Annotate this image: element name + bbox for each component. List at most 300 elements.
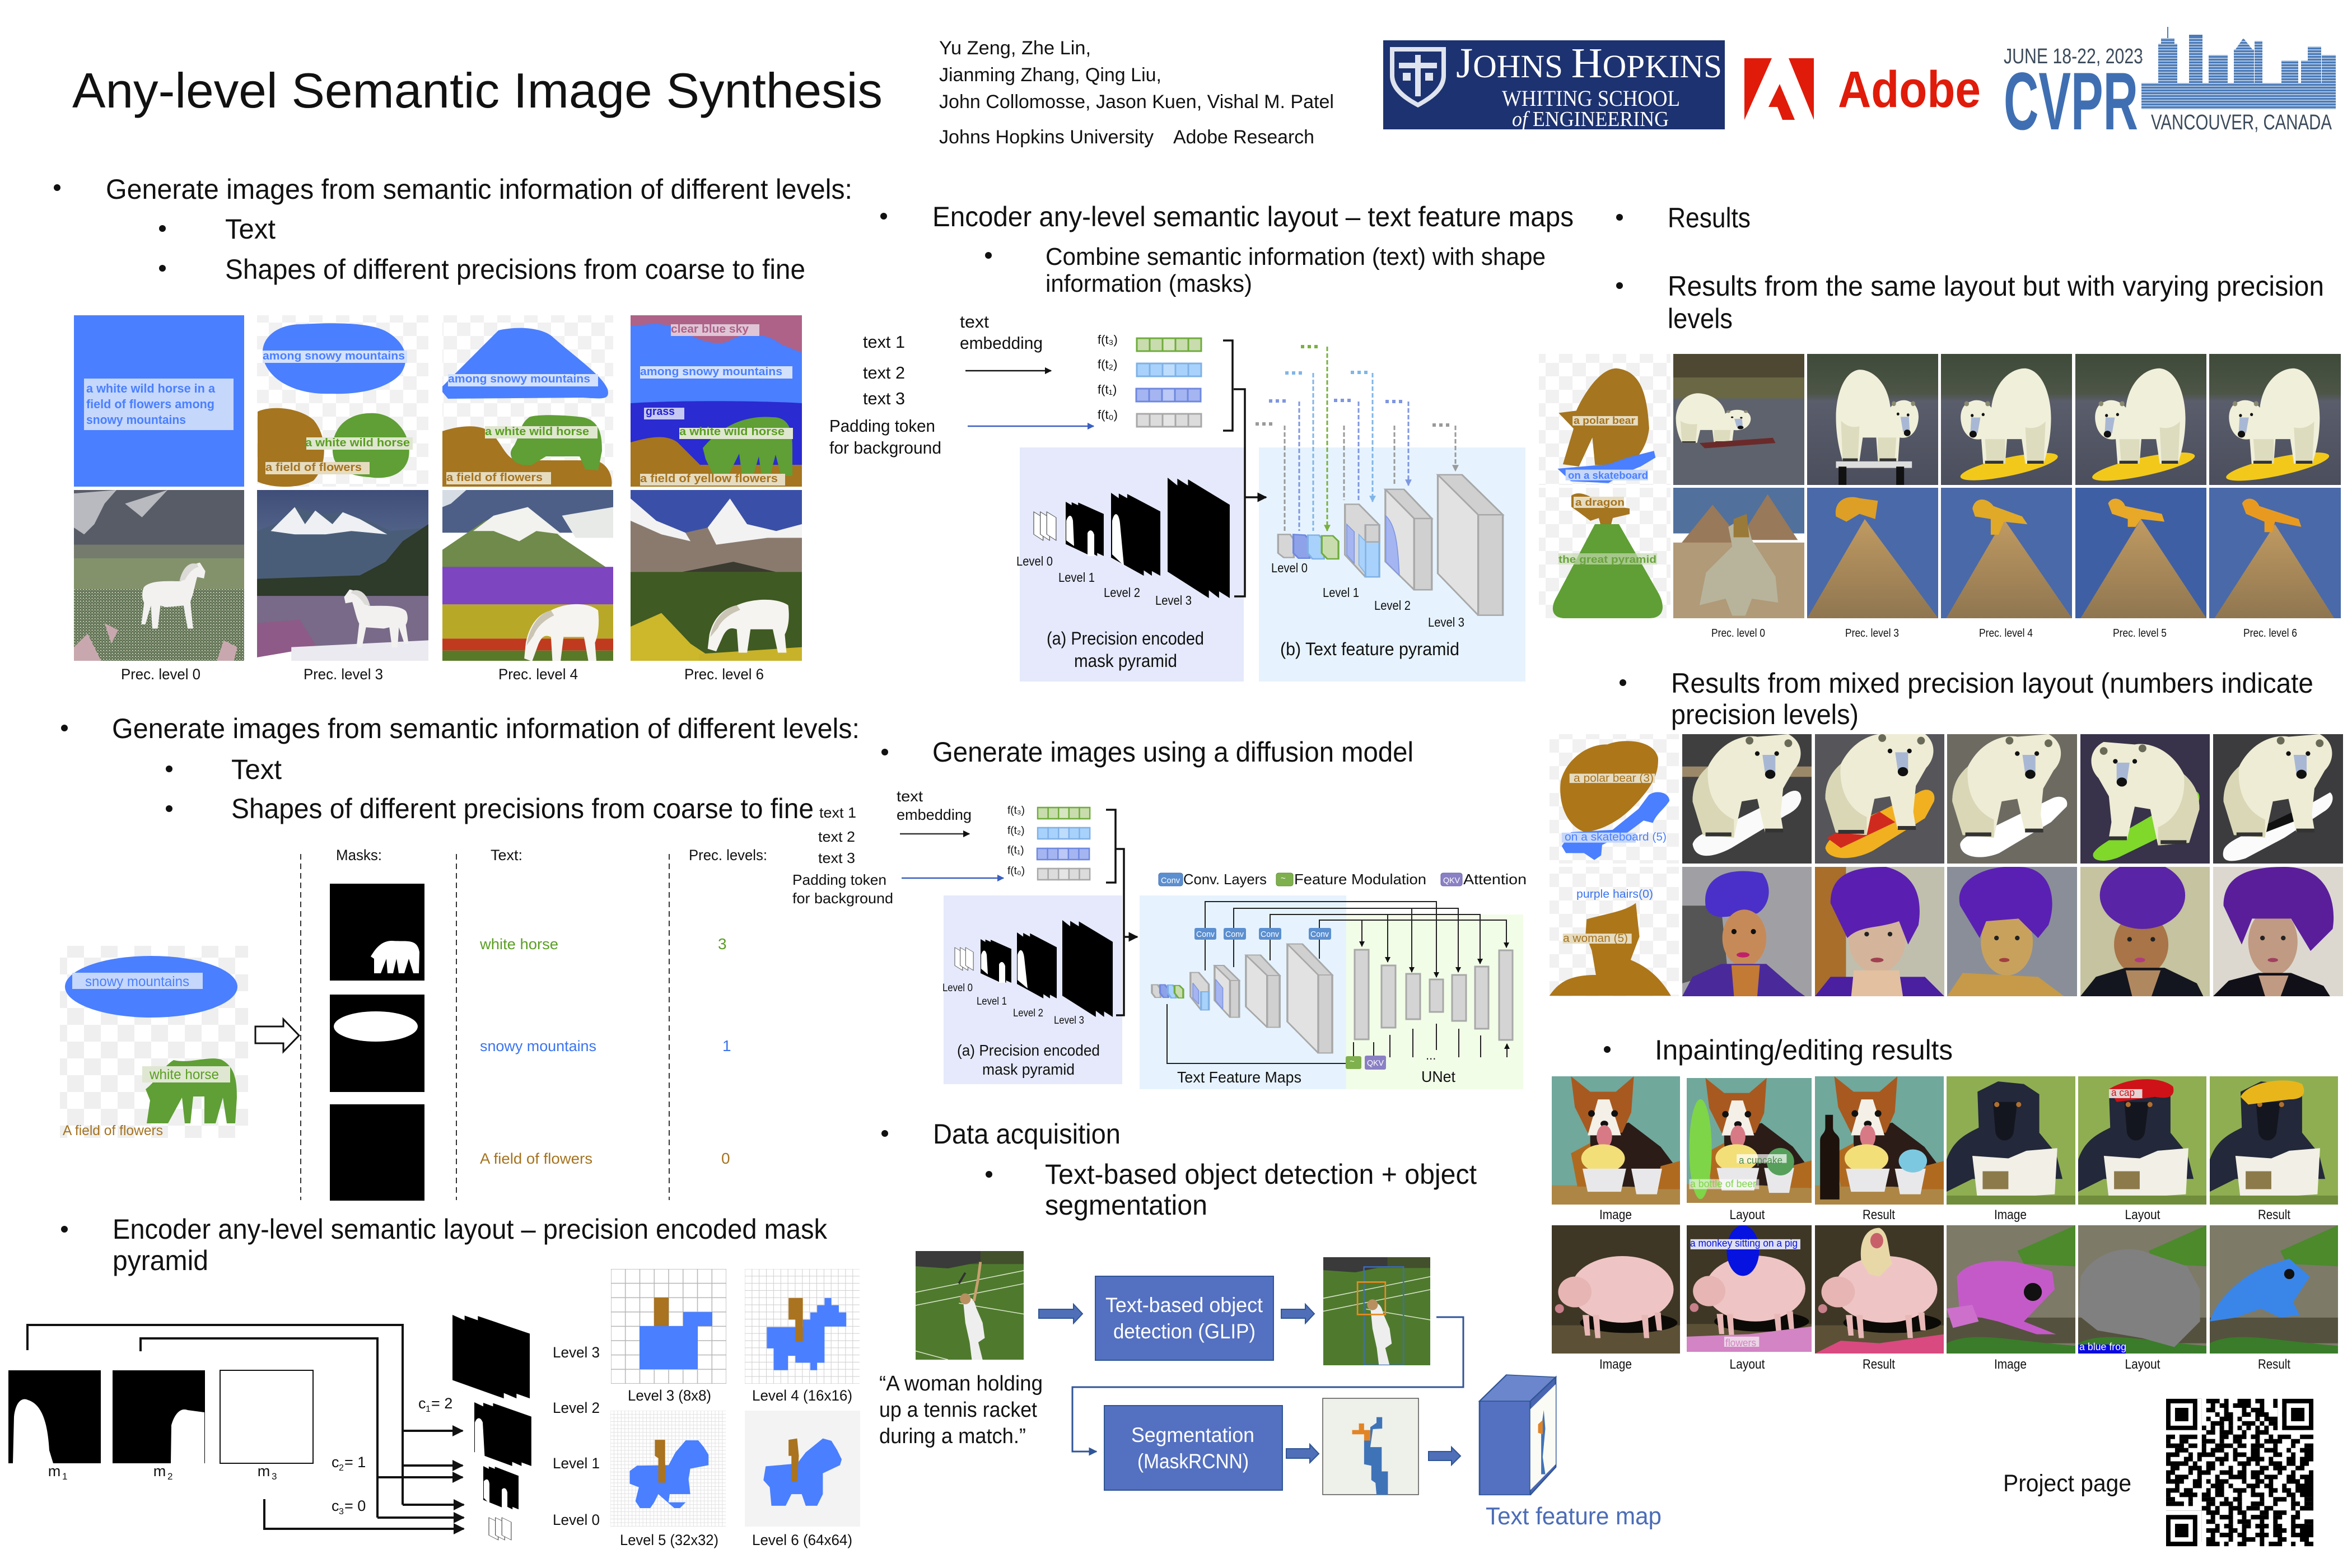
legend: QKV xyxy=(1443,876,1460,885)
photo: bear prec 6 xyxy=(2209,354,2341,485)
column headers xyxy=(336,847,767,864)
text inputs: embedding xyxy=(960,333,1043,353)
box: GLIP: Text-based object xyxy=(1105,1294,1263,1317)
panel a xyxy=(1020,447,1244,682)
section: results heading xyxy=(1616,202,2324,334)
authors: Jianming Zhang, Qing Liu, xyxy=(939,64,1161,86)
section: generate images heading: Shapes of different precisions from coarse to fine xyxy=(225,254,805,285)
section: second generate heading: Shapes of different precisions from coarse to fine xyxy=(231,793,814,824)
layout: bear mixed: a polar bear (3) xyxy=(1574,772,1654,785)
photo: woman 5 xyxy=(2213,867,2343,996)
captions: Prec. level 3 xyxy=(1845,627,1899,640)
inpainting label text xyxy=(1690,1087,2135,1352)
text inputs: text 2 xyxy=(863,363,905,382)
photo: purple frog xyxy=(1947,1225,2075,1354)
stack labels: Level 2 xyxy=(1013,1007,1043,1019)
section: inpainting heading: Inpainting/editing results xyxy=(1655,1034,1953,1066)
logo: Johns Hopkins: WHITING SCHOOL xyxy=(1502,86,1680,111)
diagram: diffusion model xyxy=(792,788,1527,1089)
photo: frog layout xyxy=(2078,1225,2206,1354)
level labels xyxy=(553,1344,600,1528)
photo: horse level 4 xyxy=(442,490,613,661)
bracket xyxy=(1106,810,1137,1015)
coefficient labels: = 0 xyxy=(344,1497,366,1514)
legend: Feature Modulation xyxy=(1294,871,1426,888)
level labels: Level 0 xyxy=(553,1511,600,1528)
level labels: Level 2 xyxy=(553,1399,600,1416)
caption quote: during a match.” xyxy=(879,1425,1026,1448)
layout sketch: snowy mountains xyxy=(85,974,189,990)
mask pyramid stacks xyxy=(1034,478,1230,598)
arrow 3 xyxy=(1286,1444,1319,1463)
grid level 5: Level 5 (32x32) xyxy=(620,1532,718,1548)
stack level 2 xyxy=(474,1402,531,1466)
logo: Johns Hopkins: JOHNS HOPKINS xyxy=(1456,40,1722,87)
diagram captions xyxy=(1177,1068,1455,1086)
panel: grid levels xyxy=(610,1269,860,1548)
mask m2: 2 xyxy=(167,1471,172,1482)
mask m3: 3 xyxy=(272,1471,277,1482)
mask m3: m xyxy=(258,1463,270,1480)
section: second generate heading: Text xyxy=(231,754,282,785)
stack labels: Level 3 xyxy=(1054,1015,1084,1026)
feature modulation and attention xyxy=(1346,1048,1436,1070)
mask m1: 1 xyxy=(62,1471,67,1482)
text inputs: for background xyxy=(829,438,941,458)
text column: snowy mountains xyxy=(480,1038,596,1054)
diagram captions: UNet xyxy=(1421,1068,1455,1085)
qr code xyxy=(2166,1399,2313,1546)
layout: dragon pyramid xyxy=(1539,488,1670,618)
logo: Johns Hopkins xyxy=(1383,40,1725,131)
inpainting captions: Image xyxy=(1599,1357,1632,1372)
inpainting label text: a bottle of beer xyxy=(1690,1178,1756,1189)
embedding labels: f(t₀) xyxy=(1098,408,1118,422)
connector xyxy=(1072,1317,1463,1452)
photo: horse level 0 xyxy=(74,490,244,661)
stack level 3 xyxy=(452,1315,530,1398)
caption: prec level labels: Prec. level 6 xyxy=(684,666,764,683)
mask m2: m xyxy=(153,1463,166,1480)
text inputs: Padding token xyxy=(829,416,935,436)
stack level 0 xyxy=(489,1518,511,1540)
unet bars xyxy=(1355,950,1513,1040)
panel: mixed layout decomposition xyxy=(60,847,767,1201)
layout: level 6: a white wild horse xyxy=(679,426,785,438)
coefficient labels: c xyxy=(332,1497,339,1514)
photo: horse level 6 xyxy=(631,490,802,661)
embedding bars xyxy=(1136,338,1201,427)
layout: polar bear xyxy=(1539,354,1670,485)
text pyramid labels: (b) Text feature pyramid xyxy=(1280,639,1459,659)
section: text feature maps heading: information (masks) xyxy=(1046,270,1252,297)
conv boxes xyxy=(1194,928,1331,940)
panel: prec level layouts xyxy=(74,315,802,487)
photo: pig layout xyxy=(1687,1225,1812,1352)
layout: polar bear: on a skateboard xyxy=(1568,470,1648,481)
photo: pig image xyxy=(1552,1225,1680,1354)
inputs: text 3 xyxy=(818,850,855,866)
skip connections xyxy=(1167,902,1507,1063)
inpainting captions: Image xyxy=(1994,1207,2027,1222)
embedding labels: f(t₁) xyxy=(1098,382,1117,396)
photo: corgi result xyxy=(1815,1076,1944,1205)
inpainting captions: Layout xyxy=(2125,1207,2160,1222)
layout: woman mixed: a woman (5) xyxy=(1563,932,1628,945)
captions: Prec. level 4 xyxy=(1979,627,2033,640)
grid level 6: Level 6 (64x64) xyxy=(752,1532,852,1548)
text pyramid labels: Level 1 xyxy=(1323,585,1359,600)
arrows xyxy=(900,834,1004,878)
authors: Yu Zeng, Zhe Lin, xyxy=(939,38,1091,59)
photo: dragon prec 4 xyxy=(1941,488,2072,618)
precision column: 1 xyxy=(722,1037,731,1054)
logo: Adobe: Adobe xyxy=(1838,61,1981,118)
embedding labels: f(t₃) xyxy=(1098,333,1118,347)
photo: bear prec 5 xyxy=(2075,354,2206,485)
logo: CVPR 2023: CVPR xyxy=(2004,55,2138,147)
coefficient labels: 1 xyxy=(426,1404,431,1414)
conv boxes: Conv xyxy=(1310,930,1329,939)
photo: blue frog xyxy=(2210,1225,2338,1354)
section: mixed precision heading: precision levels) xyxy=(1671,699,1859,730)
text inputs: text 1 xyxy=(863,332,905,352)
logo: CVPR 2023: JUNE 18-22, 2023 xyxy=(2004,45,2143,68)
inpainting captions: Result xyxy=(2258,1207,2290,1222)
section: text feature maps heading: Combine semantic information (text) with shape xyxy=(1046,243,1546,270)
layout: polar bear: a polar bear xyxy=(1574,415,1635,426)
logo: Adobe xyxy=(1744,58,1981,120)
box: GLIP xyxy=(1095,1276,1273,1360)
layout: level 4: a white wild horse xyxy=(485,426,589,438)
mask pyramid labels: Level 0 xyxy=(1016,554,1053,568)
precision column: 0 xyxy=(721,1150,730,1167)
coefficient labels xyxy=(332,1395,452,1516)
embedding labels: f(t₂) xyxy=(1098,357,1117,371)
caption: prec level labels: Prec. level 0 xyxy=(121,666,200,683)
label: project page: Project page xyxy=(2003,1470,2131,1497)
mask: ellipse xyxy=(330,995,424,1092)
layout: level 4: among snowy mountains xyxy=(448,373,590,385)
inpainting captions: Layout xyxy=(1729,1357,1765,1372)
coefficient labels: 3 xyxy=(339,1507,344,1516)
feature modulation and attention: ... xyxy=(1426,1048,1436,1062)
layout: woman mixed xyxy=(1550,867,1679,996)
arrow: hollow xyxy=(255,1019,299,1052)
feature modulation and attention: ~ xyxy=(1350,1057,1355,1066)
stack level 1 xyxy=(483,1466,519,1509)
photo: dragon prec 6 xyxy=(2209,488,2341,618)
inpainting captions: Layout xyxy=(1729,1207,1765,1222)
photo: woman 2 xyxy=(1815,867,1944,996)
inpainting label text: a blue frog xyxy=(2079,1341,2126,1352)
mask pyramid labels: Level 3 xyxy=(1155,593,1192,608)
legend: Attention xyxy=(1463,871,1527,888)
caption text feature map: Text feature map xyxy=(1486,1502,1662,1530)
authors: Johns Hopkins University xyxy=(939,127,1154,148)
inpainting captions: Image xyxy=(1599,1207,1632,1222)
layout: bear mixed: on a skateboard (5) xyxy=(1565,831,1667,843)
coefficient labels: c xyxy=(332,1454,339,1471)
panel b xyxy=(1259,447,1525,682)
section: text feature maps heading xyxy=(880,201,1574,297)
text pyramid cubes xyxy=(1278,475,1503,615)
layout: level 0: snowy mountains xyxy=(86,413,186,427)
photo: corgi layout xyxy=(1687,1078,1812,1203)
segmentation result xyxy=(1323,1398,1418,1495)
title: Any-level Semantic Image Synthesis xyxy=(72,63,883,118)
captions: Prec. level 5 xyxy=(2113,627,2167,640)
authors: Adobe Research xyxy=(1173,127,1314,148)
grid level 6 xyxy=(745,1411,860,1548)
section: text feature maps heading: Encoder any-level semantic layout – text feature maps xyxy=(932,201,1574,232)
photo: dragon prec 0 xyxy=(1673,488,1804,618)
mask m3 xyxy=(220,1370,313,1482)
column headers: Masks: xyxy=(336,847,382,864)
caption quote: up a tennis racket xyxy=(879,1398,1037,1422)
embedding xyxy=(1007,805,1090,880)
logo: CVPR 2023 xyxy=(2004,27,2336,147)
inpainting captions: Image xyxy=(1994,1357,2027,1372)
text inputs: text 3 xyxy=(863,389,905,408)
layout: level 0: a white wild horse in a xyxy=(86,381,216,395)
legend: Conv xyxy=(1161,876,1180,885)
inpainting captions: Layout xyxy=(2125,1357,2160,1372)
photo: tennis with boxes xyxy=(1323,1257,1430,1365)
connectors xyxy=(27,1325,464,1529)
section: mixed precision heading xyxy=(1620,668,2313,730)
diagram captions: Text Feature Maps xyxy=(1177,1068,1301,1086)
mask m2 xyxy=(113,1370,205,1482)
box: segmentation: (MaskRCNN) xyxy=(1137,1450,1249,1473)
inputs: for background xyxy=(792,890,893,907)
text pyramid labels xyxy=(1271,561,1464,659)
text column: A field of flowers xyxy=(480,1150,592,1167)
inpainting label text: flowers xyxy=(1725,1337,1756,1348)
photo: dark dog image xyxy=(1947,1076,2075,1205)
layout: level 6 xyxy=(631,315,802,487)
dots xyxy=(1256,347,1450,425)
arrow 1 xyxy=(1039,1304,1082,1323)
legend xyxy=(1159,871,1527,888)
brackets xyxy=(1223,340,1266,596)
inputs xyxy=(792,788,972,907)
text column: white horse xyxy=(479,936,558,953)
photo: mixed bear 4 xyxy=(2080,734,2210,864)
coefficient labels: = 2 xyxy=(431,1395,452,1412)
layout: dragon pyramid: the great pyramid xyxy=(1558,554,1656,565)
layout sketch: A field of flowers xyxy=(63,1123,163,1138)
inpainting label text: a cupcake xyxy=(1739,1155,1782,1166)
inputs: text 2 xyxy=(818,828,855,845)
mask: white horse xyxy=(330,884,424,981)
layout: level 4: a field of flowers xyxy=(446,472,543,484)
section: generate images heading xyxy=(54,174,852,285)
mask pyramid labels xyxy=(1016,554,1204,671)
layout: level 0: field of flowers among xyxy=(86,397,214,411)
coefficient labels: = 1 xyxy=(344,1454,366,1471)
photo: dark dog layout xyxy=(2078,1076,2206,1205)
text pyramid labels: Level 0 xyxy=(1271,561,1308,575)
section: data acquisition heading xyxy=(881,1118,1477,1221)
captions: Prec. level 6 xyxy=(2243,627,2297,640)
section: data acquisition heading: segmentation xyxy=(1045,1189,1207,1221)
conv boxes: Conv xyxy=(1225,930,1244,939)
grid level 5 xyxy=(610,1411,726,1548)
photo: pig result xyxy=(1815,1225,1944,1354)
coefficient labels: 2 xyxy=(339,1463,344,1473)
box: GLIP: detection (GLIP) xyxy=(1113,1320,1256,1343)
layout: level 4 xyxy=(442,315,613,487)
panel text feature maps xyxy=(1140,895,1346,1089)
inputs: text 1 xyxy=(819,804,856,821)
inpainting captions: Result xyxy=(1863,1207,1895,1222)
section: mixed precision heading: Results from mixed precision layout (numbers indicate xyxy=(1671,668,2313,699)
text pyramid labels: Level 3 xyxy=(1428,615,1464,629)
embedding: f(t₁) xyxy=(1007,844,1024,856)
conv boxes: Conv xyxy=(1196,930,1215,939)
layout: level 3 xyxy=(257,315,428,487)
section: data acquisition heading: Data acquisition xyxy=(933,1118,1121,1150)
arrows: embedding xyxy=(965,371,1094,426)
conv boxes: Conv xyxy=(1261,930,1279,939)
inputs: Padding token xyxy=(792,871,886,888)
layout sketch: white horse xyxy=(149,1067,219,1082)
grid level 3 xyxy=(611,1269,726,1404)
stack labels: mask pyramid xyxy=(982,1061,1075,1078)
section: results heading: Results xyxy=(1668,202,1751,234)
legend: Conv. Layers xyxy=(1183,871,1267,888)
mask pyramid labels: mask pyramid xyxy=(1074,651,1177,671)
captions xyxy=(1711,627,2297,640)
section: results heading: levels xyxy=(1668,303,1733,334)
text column xyxy=(479,936,596,1167)
inputs: embedding xyxy=(897,806,972,823)
level labels: Level 3 xyxy=(553,1344,600,1361)
photo: mixed bear 2 xyxy=(1815,731,1944,864)
precision column xyxy=(718,935,731,1167)
text inputs xyxy=(829,312,1043,458)
column headers: Prec. levels: xyxy=(689,847,767,864)
photo: bear prec 4 xyxy=(1941,354,2072,485)
photo: woman 1 xyxy=(1682,867,1812,996)
embedding: f(t₂) xyxy=(1007,825,1025,837)
mask pyramid labels: Level 2 xyxy=(1104,585,1140,600)
caption quote xyxy=(879,1372,1043,1448)
photo: tennis xyxy=(916,1251,1024,1360)
feature modulation and attention: QKV xyxy=(1367,1058,1384,1068)
stack labels: Level 1 xyxy=(977,996,1007,1007)
precision column: 3 xyxy=(718,935,727,953)
photo: mixed bear 1 xyxy=(1682,734,1812,864)
authors xyxy=(939,38,1334,148)
embedding: f(t₃) xyxy=(1007,805,1025,816)
layout: level 6: among snowy mountains xyxy=(640,366,782,378)
section: second generate heading xyxy=(61,713,860,824)
layout: level 6: grass xyxy=(646,405,675,418)
box: segmentation: Segmentation xyxy=(1131,1424,1254,1446)
text feature map cube xyxy=(1480,1375,1556,1495)
layout sketch xyxy=(60,946,248,1138)
section: diffusion heading: Generate images using a diffusion model xyxy=(932,736,1413,768)
inpainting captions: Result xyxy=(1863,1357,1895,1372)
stack labels: (a) Precision encoded xyxy=(957,1042,1100,1059)
panel: mixed precision results xyxy=(1550,731,2343,996)
arrow 4 xyxy=(1429,1447,1460,1465)
layout: bear mixed xyxy=(1550,734,1679,864)
photo: horse level 3 xyxy=(257,490,428,661)
layout: level 6: clear blue sky xyxy=(671,323,749,335)
section: generate images heading: Generate images from semantic information of different levels: xyxy=(106,174,852,205)
text feature cubes xyxy=(1152,944,1332,1053)
section: data acquisition heading: Text-based object detection + object xyxy=(1045,1159,1477,1190)
mask m1: m xyxy=(48,1463,60,1480)
section: encoder precision heading: Encoder any-level semantic layout – precision encoded mask xyxy=(113,1214,828,1245)
logo: Johns Hopkins: of ENGINEERING xyxy=(1512,108,1669,131)
text pyramid labels: Level 2 xyxy=(1374,598,1411,613)
mask pyramid labels: (a) Precision encoded xyxy=(1047,628,1204,648)
photo: mixed bear 5 xyxy=(2213,734,2343,864)
caption quote: “A woman holding xyxy=(879,1372,1043,1396)
layout: level 6: a field of yellow flowers xyxy=(640,473,778,485)
stack labels: Level 0 xyxy=(942,982,973,994)
panel: generated horse images xyxy=(74,490,802,663)
layout: woman mixed: purple hairs(0) xyxy=(1576,888,1653,900)
inpainting label text: a cap xyxy=(2111,1087,2135,1098)
authors: John Collomosse, Jason Kuen, Vishal M. Patel xyxy=(939,91,1334,113)
inputs: text xyxy=(897,788,923,805)
photo: woman 3 xyxy=(1947,866,2077,996)
diagram: data acquisition xyxy=(879,1251,1662,1530)
level labels: Level 1 xyxy=(553,1455,600,1472)
inpainting captions xyxy=(1599,1207,2290,1372)
diagram: precision encoded mask pyramid xyxy=(8,1315,600,1540)
panel a xyxy=(944,895,1122,1084)
caption: prec level labels xyxy=(121,666,764,683)
section: results heading: Results from the same layout but with varying precision xyxy=(1668,270,2324,302)
panel: varying precision results xyxy=(1539,354,2341,640)
coefficient labels: c xyxy=(418,1395,426,1412)
mask pyramid labels: Level 1 xyxy=(1058,570,1095,585)
text inputs: text xyxy=(960,312,989,332)
section: generate images heading: Text xyxy=(225,213,276,245)
captions: Prec. level 0 xyxy=(1711,627,1765,640)
photo: bear prec 0 xyxy=(1673,354,1804,485)
layout: level 0 xyxy=(74,315,244,487)
layout: level 3: a white wild horse xyxy=(305,437,410,449)
photo: bear prec 3 xyxy=(1807,354,1938,485)
column headers: Text: xyxy=(491,847,522,864)
embedding labels xyxy=(1098,333,1118,422)
photo: dragon prec 3 xyxy=(1807,488,1938,618)
grid level 3: Level 3 (8x8) xyxy=(628,1387,711,1404)
photo: mixed bear 3 xyxy=(1947,734,2077,864)
legend: ~ xyxy=(1281,874,1286,883)
layout: dragon pyramid: a dragon xyxy=(1575,497,1625,508)
inpainting captions: Result xyxy=(2258,1357,2290,1372)
caption: prec level labels: Prec. level 3 xyxy=(304,666,383,683)
grid level 4: Level 4 (16x16) xyxy=(752,1387,852,1404)
photo: dark dog result xyxy=(2210,1076,2338,1205)
stacks xyxy=(955,920,1113,1017)
caption: prec level labels: Prec. level 4 xyxy=(498,666,578,683)
section: encoder precision heading xyxy=(61,1214,828,1276)
inpainting label text: a monkey sitting on a pig xyxy=(1690,1238,1798,1249)
arrow 2 xyxy=(1281,1304,1314,1323)
photo: dragon prec 5 xyxy=(2075,488,2206,618)
photo: woman 4 xyxy=(2080,862,2210,996)
panel: inpainting results xyxy=(1552,1076,2338,1372)
